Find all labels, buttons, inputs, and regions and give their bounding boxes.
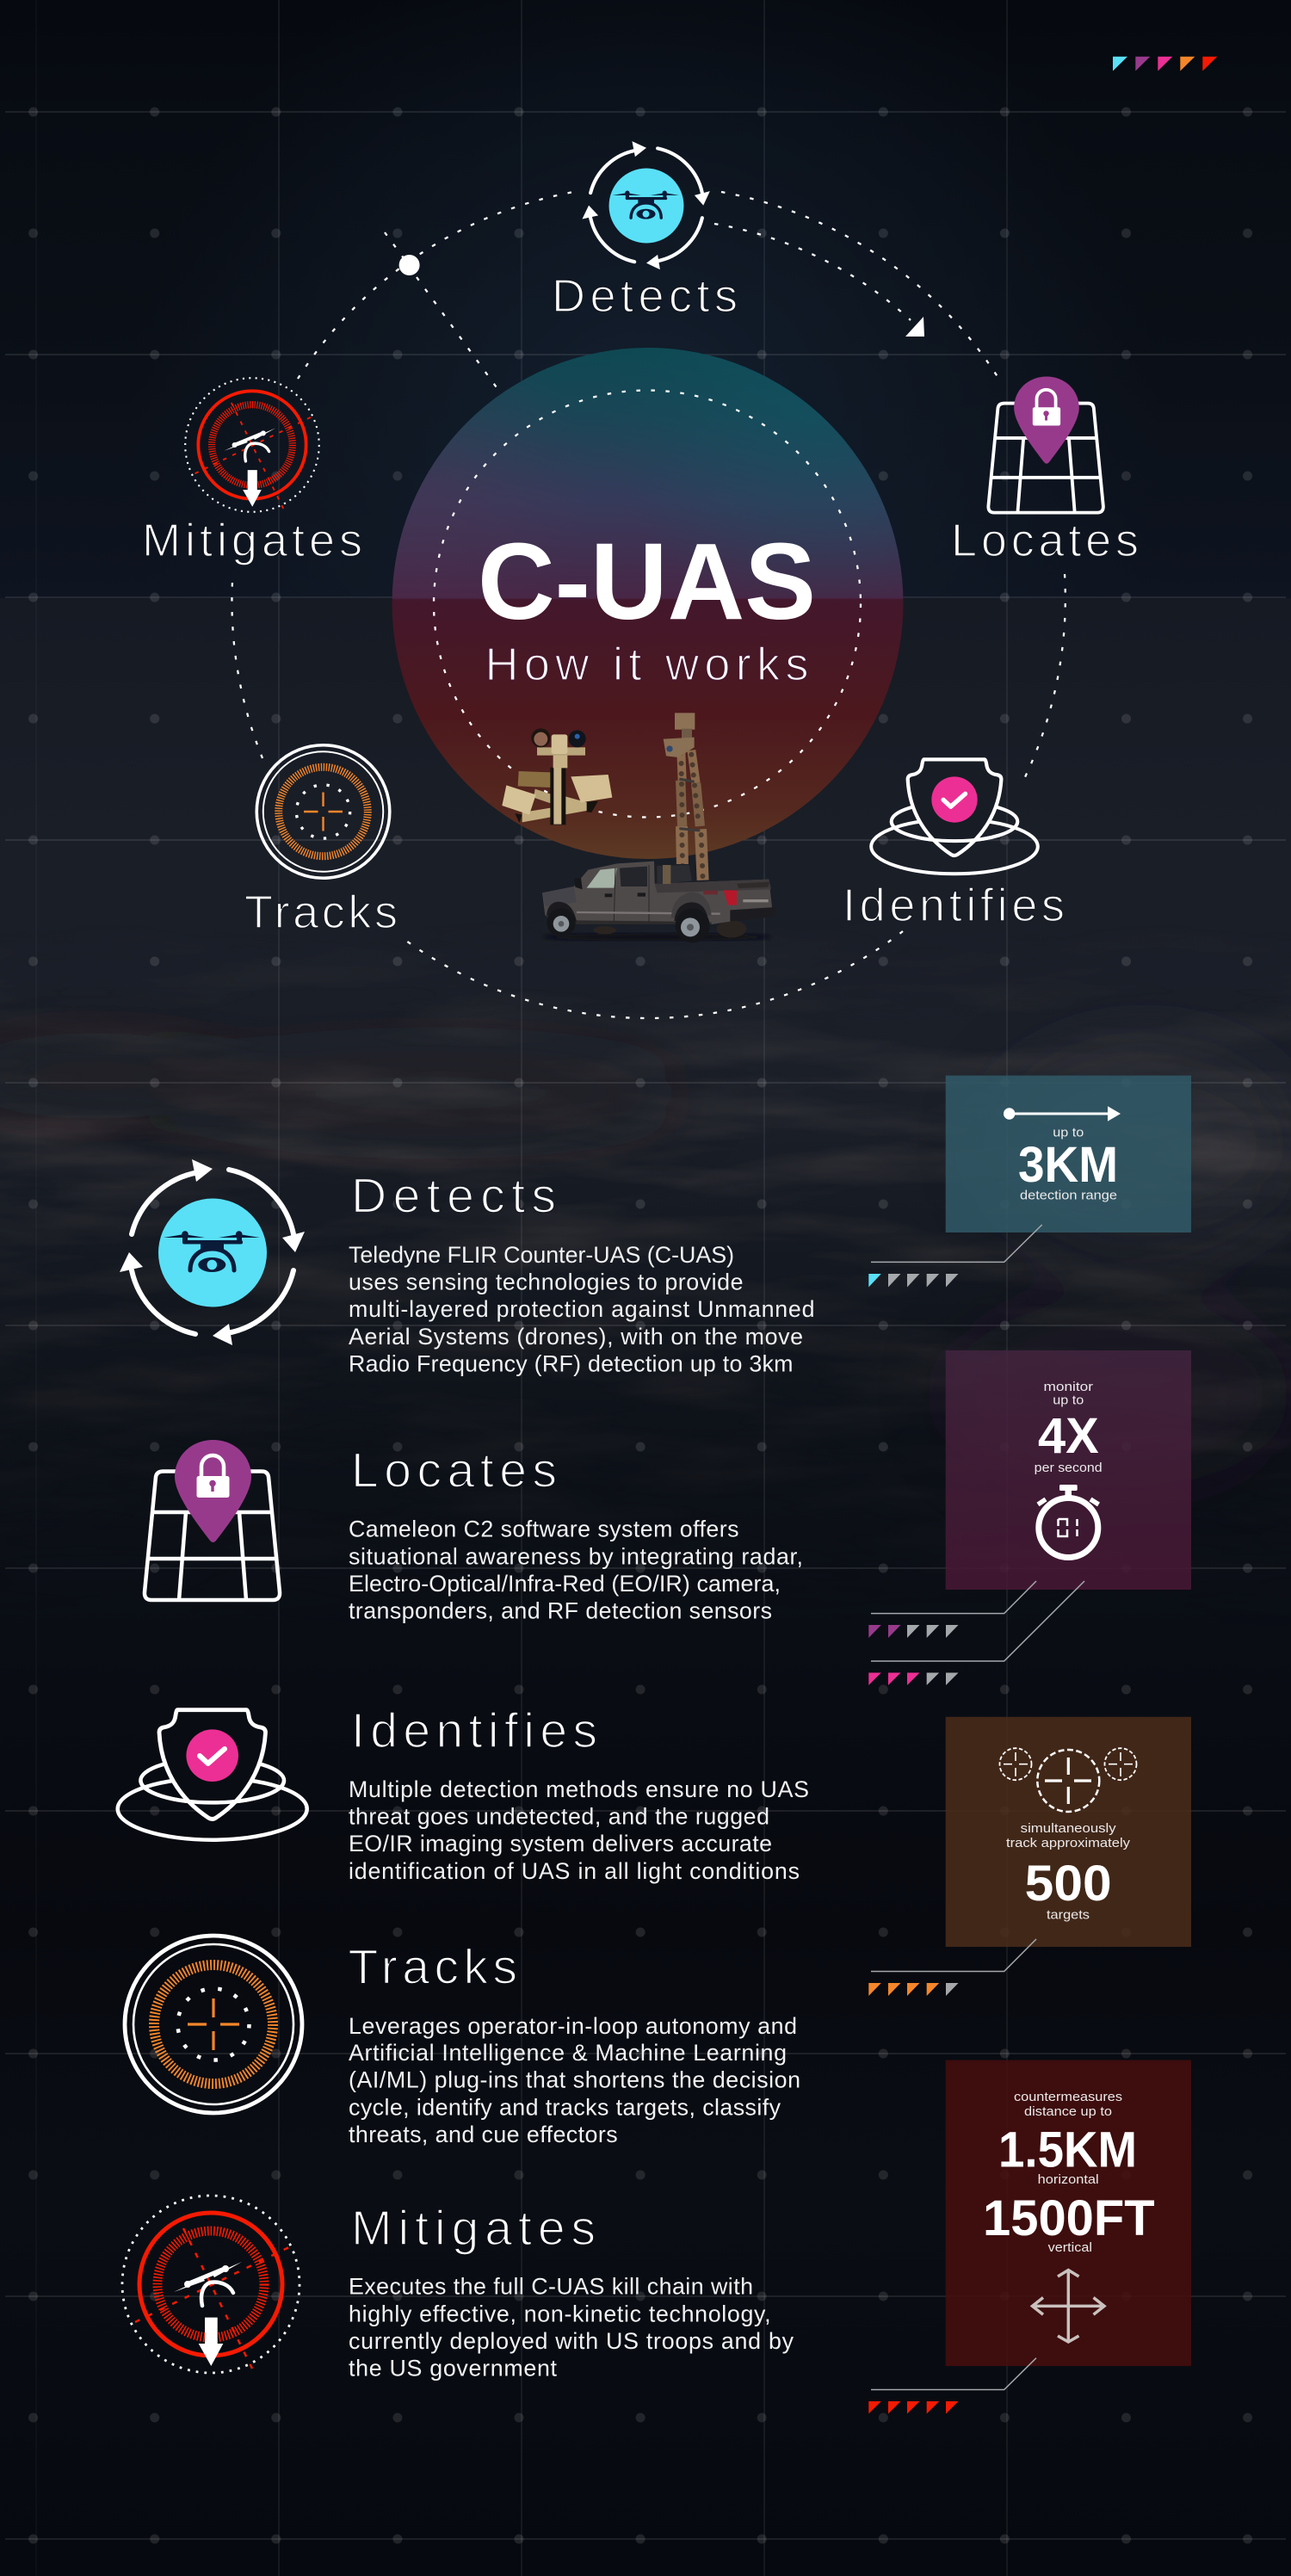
body text: Leverages operator-in-loop autonomy and <box>349 2013 797 2039</box>
body text: Aerial Systems (drones), with on the move <box>349 1324 803 1350</box>
connector and rating: tracking <box>868 1939 1036 1996</box>
panel: countermeasures distance: 1.5KM <box>998 2122 1137 2178</box>
connector and rating: mitigation <box>868 2358 1036 2413</box>
title: C-UAS <box>478 521 816 642</box>
label: Tracks: Tracks <box>244 886 398 938</box>
icon: map pin with lock <box>145 1440 280 1600</box>
legend: five colour flags <box>1113 57 1217 71</box>
panel: 3KM detection range: up to <box>1053 1126 1084 1140</box>
body text: currently deployed with US troops and by <box>349 2328 794 2354</box>
section: Tracks <box>125 1936 800 2147</box>
sensor head on stand <box>502 728 612 825</box>
panel: countermeasures distance: countermeasures <box>1014 2091 1122 2104</box>
arrow: range <box>1004 1106 1121 1121</box>
icon: four-way arrows <box>1032 2270 1104 2342</box>
body text: multi-layered protection against Unmanned <box>349 1296 814 1322</box>
body text: threat goes undetected, and the rugged <box>349 1803 769 1829</box>
panel: 4X per second: 4X <box>1038 1408 1099 1464</box>
body text: identification of UAS in all light conditions <box>349 1858 800 1884</box>
panel: 500 targets <box>946 1717 1191 1947</box>
body text: (AI/ML) plug-ins that shortens the decision <box>349 2067 800 2093</box>
panel: 500 targets: targets <box>1047 1909 1090 1923</box>
panel: countermeasures distance: distance up to <box>1024 2105 1112 2119</box>
body text: Teledyne FLIR Counter-UAS (C-UAS) <box>349 1242 734 1268</box>
panel: 4X per second: up to <box>1053 1394 1084 1408</box>
body text: cycle, identify and tracks targets, classify <box>349 2095 781 2121</box>
body text: transponders, and RF detection sensors <box>349 1598 772 1624</box>
body text <box>349 1776 809 1884</box>
body text: Electro-Optical/Infra-Red (EO/IR) camera, <box>349 1571 781 1597</box>
label: Mitigates: Mitigates <box>142 515 362 566</box>
icon: targeted drone with down arrow <box>122 2196 300 2373</box>
panel: 3KM detection range <box>946 1076 1191 1232</box>
section: Identifies <box>118 1703 809 1884</box>
section: Locates <box>145 1440 803 1624</box>
body text: Multiple detection methods ensure no UAS <box>349 1776 809 1802</box>
body text: uses sensing technologies to provide <box>349 1269 744 1294</box>
body text <box>349 1242 814 1376</box>
section: Mitigates <box>122 2196 794 2381</box>
icon: tracks (small) <box>256 745 390 878</box>
pickup truck <box>542 862 775 942</box>
heading: Identifies <box>351 1703 597 1758</box>
connector and rating: monitor A <box>868 1581 1036 1638</box>
body text: Artificial Intelligence & Machine Learning <box>349 2040 787 2066</box>
icon: tracking reticle <box>125 1936 302 2113</box>
icon: drone with rotating arrows <box>120 1159 305 1345</box>
label: Locates: Locates <box>951 515 1139 566</box>
connector and rating: monitor B <box>868 1581 1084 1685</box>
panel: countermeasures distance: horizontal <box>1038 2173 1099 2187</box>
icon: mitigates (small) <box>185 378 319 512</box>
heading: Mitigates <box>351 2201 596 2256</box>
panel: countermeasures distance: 1500FT <box>983 2190 1155 2246</box>
panel: countermeasures distance: vertical <box>1048 2241 1092 2255</box>
connector and rating: detection <box>868 1225 1042 1288</box>
label: Detects: Detects <box>552 270 738 322</box>
body text <box>349 2274 794 2381</box>
body text: the US government <box>349 2356 558 2381</box>
central orb <box>387 344 912 859</box>
panel: 500 targets: track approximately <box>1006 1837 1131 1850</box>
panel: 500 targets: 500 <box>1025 1856 1112 1912</box>
body text: Cameleon C2 software system offers <box>349 1517 738 1542</box>
heading: Locates <box>351 1442 557 1498</box>
icon: shield with check <box>118 1710 307 1840</box>
subtitle: How it works <box>485 639 809 690</box>
body text: threats, and cue effectors <box>349 2122 618 2147</box>
body text <box>349 2013 800 2147</box>
heading: Tracks <box>348 1939 517 1994</box>
icon: detects (small) <box>582 141 710 269</box>
dotted orbit rings <box>232 191 1066 1018</box>
icon: locates (small) <box>988 377 1103 513</box>
panel: 4X per second: monitor <box>1043 1381 1093 1394</box>
orbit arrowhead <box>905 317 924 337</box>
body text: highly effective, non-kinetic technology, <box>349 2301 771 2326</box>
icon: stopwatch with 01 readout <box>1038 1485 1098 1558</box>
label: Identifies: Identifies <box>843 880 1065 931</box>
orbit marker dot <box>399 255 420 275</box>
panel: 500 targets: simultaneously <box>1021 1822 1116 1836</box>
panel: 4X per second <box>946 1350 1191 1590</box>
section: Detects <box>120 1159 814 1376</box>
panel: 3KM detection range: detection range <box>1020 1189 1117 1203</box>
panel: countermeasures distance <box>946 2060 1191 2366</box>
body text: situational awareness by integrating radar, <box>349 1544 803 1570</box>
body text: Radio Frequency (RF) detection up to 3km <box>349 1350 794 1376</box>
icon: three target reticles <box>1000 1748 1136 1812</box>
telescoping mast <box>664 713 703 881</box>
body text: EO/IR imaging system delivers accurate <box>349 1831 772 1856</box>
illustration: truck with sensor mast and sensor head <box>502 713 775 942</box>
panel: 4X per second: per second <box>1035 1461 1103 1475</box>
body text: Executes the full C-UAS kill chain with <box>349 2274 753 2300</box>
heading: Detects <box>351 1169 556 1224</box>
panel: 3KM detection range: 3KM <box>1018 1137 1118 1193</box>
body text <box>349 1517 803 1624</box>
icon: identifies (small) <box>871 759 1038 874</box>
